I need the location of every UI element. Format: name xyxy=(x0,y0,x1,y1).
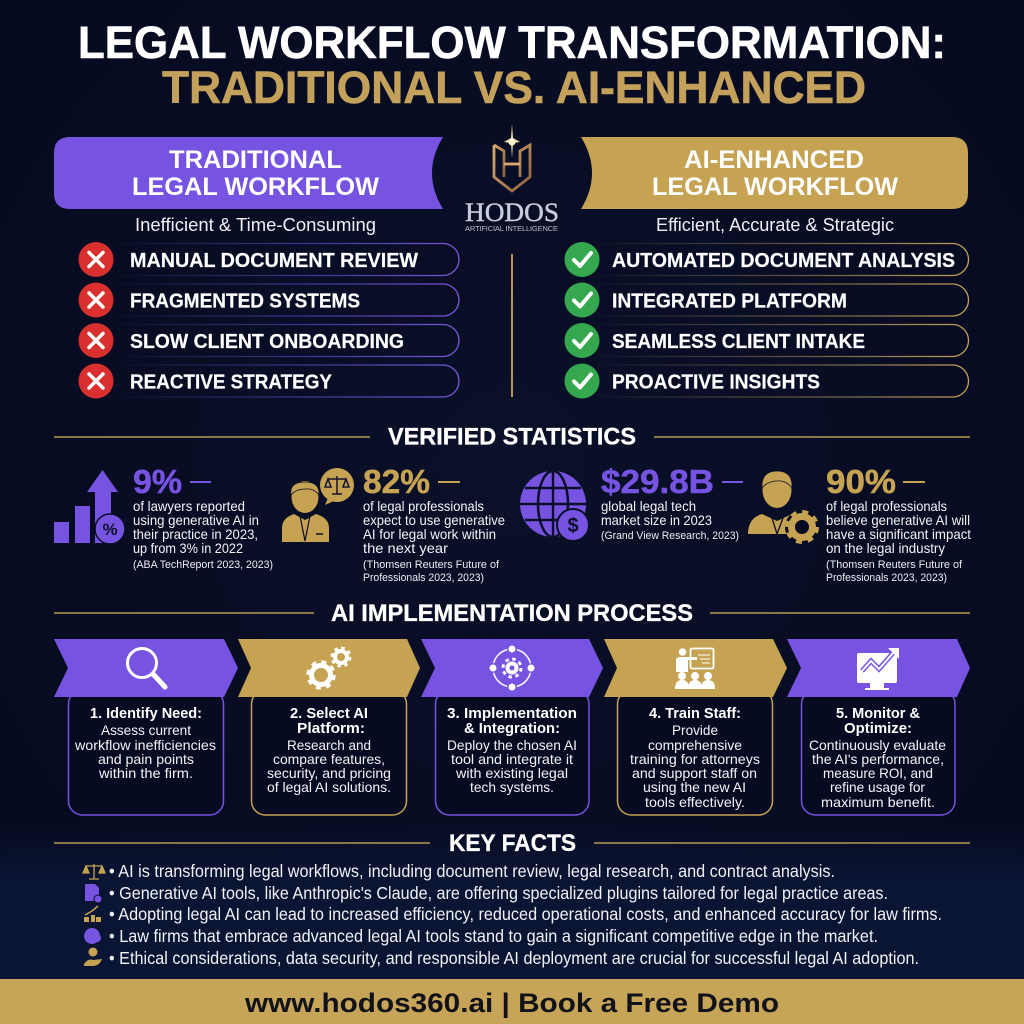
stat: 82 percent xyxy=(282,463,505,584)
stat: 29.8B: market size in 2023 xyxy=(601,512,712,528)
step 3: implementation and integration: & Integration: xyxy=(464,720,560,737)
list: key facts: • Ethical considerations, data security, and responsible AI deployment are crucial for successful legal AI adoption. xyxy=(109,948,919,968)
stat: 90 percent xyxy=(748,463,971,584)
step 2: select AI platform: Research and xyxy=(287,737,371,753)
stat: 90 percent: on the legal industry xyxy=(826,540,945,556)
step 5: monitor and optimize: measure ROI, and xyxy=(823,765,933,781)
step 3: implementation and integration: 3. Implementation xyxy=(447,705,577,722)
step 5: monitor and optimize: refine usage for xyxy=(830,779,925,795)
panel: AI-enhanced header banner: AI-ENHANCED xyxy=(684,146,864,174)
stat: 90 percent: (Thomsen Reuters Future of xyxy=(826,559,963,571)
stat: 82 percent: expect to use generative xyxy=(363,512,505,528)
title: TRADITIONAL VS. AI-ENHANCED xyxy=(162,62,866,113)
step 5: monitor and optimize: maximum benefit. xyxy=(821,794,935,810)
icon: integration cycle xyxy=(490,646,534,690)
logo: Hodos xyxy=(465,124,559,233)
stat: 82 percent: Professionals 2023, 2023) xyxy=(363,572,484,584)
footer call to action: www.hodos360.ai | Book a Free Demo xyxy=(244,988,779,1018)
heading: verified statistics: VERIFIED STATISTICS xyxy=(388,424,636,450)
step 2: select AI platform: of legal AI solutions. xyxy=(267,779,391,795)
step 5: monitor and optimize xyxy=(787,639,970,815)
title: LEGAL WORKFLOW TRANSFORMATION: xyxy=(78,17,946,68)
list: key facts: • Adopting legal AI can lead to increased efficiency, reduced operational costs, and enhanced accuracy for law firms. xyxy=(109,904,942,924)
logo: Hodos: HODOS xyxy=(465,198,559,227)
list: traditional problems: REACTIVE STRATEGY xyxy=(130,372,333,394)
step 4: train staff: 4. Train Staff: xyxy=(649,705,741,722)
list: key facts: • AI is transforming legal workflows, including document review, legal research, and contract analysis. xyxy=(109,861,835,881)
icon: gears xyxy=(308,648,350,688)
step 4: train staff: comprehensive xyxy=(648,737,742,753)
step 3: implementation and integration: Deploy the chosen AI xyxy=(447,737,577,753)
heading: AI implementation process: AI IMPLEMENTATION PROCESS xyxy=(331,600,693,627)
panel: traditional header banner: TRADITIONAL xyxy=(169,146,342,174)
stat: 90 percent: Professionals 2023, 2023) xyxy=(826,572,947,584)
icon: scales xyxy=(83,864,105,879)
stat: 9 percent: (ABA TechReport 2023, 2023) xyxy=(133,559,273,571)
stat: 90 percent: of legal professionals xyxy=(826,498,947,514)
step 4: train staff: tools effectively. xyxy=(645,794,745,810)
list: AI-enhanced benefits: PROACTIVE INSIGHTS xyxy=(612,372,820,394)
step 3: implementation and integration: tech systems. xyxy=(470,779,554,795)
list: AI-enhanced benefits: SEAMLESS CLIENT INTAKE xyxy=(612,331,865,353)
list: AI-enhanced benefits: INTEGRATED PLATFORM xyxy=(612,290,847,312)
step 5: monitor and optimize: Continuously evaluate xyxy=(809,737,946,753)
step 5: monitor and optimize: Optimize: xyxy=(844,720,912,737)
step 1: identify need: and pain points xyxy=(98,751,194,767)
stat: 29.8B xyxy=(520,463,743,542)
logo: Hodos: ARTIFICIAL INTELLIGENCE xyxy=(465,224,558,233)
list: traditional problems: SLOW CLIENT ONBOARDING xyxy=(130,331,404,353)
heading: key facts: KEY FACTS xyxy=(449,830,576,857)
step 2: select AI platform: Platform: xyxy=(297,720,365,737)
list: traditional problems xyxy=(78,242,459,398)
step 4: train staff: using the new AI xyxy=(643,779,746,795)
list: traditional problems: MANUAL DOCUMENT REVIEW xyxy=(130,250,418,272)
step 4: train staff: training for attorneys xyxy=(630,751,760,767)
stat: 82 percent: (Thomsen Reuters Future of xyxy=(363,559,500,571)
stat: 90 percent: have a significant impact xyxy=(826,526,971,542)
step 1: identify need: within the firm. xyxy=(98,765,193,781)
list: key facts: • Generative AI tools, like Anthropic's Claude, are offering specialized plugins tailored for legal practice areas. xyxy=(109,883,888,903)
stat: 82 percent: the next year xyxy=(363,540,448,556)
stat: 9 percent: 9% xyxy=(133,463,182,500)
step 2: select AI platform: compare features, xyxy=(273,751,385,767)
icon: document xyxy=(85,884,102,903)
icon: magnifier xyxy=(128,648,165,687)
stat: 9 percent xyxy=(54,463,273,571)
step 2: select AI platform: 2. Select AI xyxy=(290,705,368,722)
step 5: monitor and optimize: 5. Monitor & xyxy=(836,705,920,722)
stat: 90 percent: believe generative AI will xyxy=(826,512,970,528)
step 2: select AI platform xyxy=(238,639,420,815)
stat: 82 percent: of legal professionals xyxy=(363,498,484,514)
stat: 9 percent: using generative AI in xyxy=(133,512,259,528)
list: key facts xyxy=(83,861,942,968)
step 1: identify need: 1. Identify Need: xyxy=(90,705,202,722)
stat: 29.8B: (Grand View Research, 2023) xyxy=(601,530,739,542)
stat: 82 percent: AI for legal work within xyxy=(363,526,496,542)
stat: 29.8B: global legal tech xyxy=(601,498,696,514)
step 4: train staff: Provide xyxy=(672,722,718,738)
panel: traditional header banner xyxy=(54,137,443,209)
footer call to action xyxy=(0,979,1024,1024)
icon: hand with coin xyxy=(84,948,102,966)
text: AI-enhanced subtitle: Efficient, Accurate & Strategic xyxy=(656,215,894,235)
step 2: select AI platform: security, and pricing xyxy=(267,765,391,781)
icon: rising bars with percent xyxy=(54,470,125,544)
icon: globe with dollar xyxy=(520,471,589,541)
icon: lawyer with scales bubble xyxy=(282,468,354,542)
text: traditional subtitle: Inefficient & Time-Consuming xyxy=(135,215,376,235)
stat: 9 percent: their practice in 2023, xyxy=(133,526,258,542)
step 4: train staff: and support staff on xyxy=(632,765,757,781)
icon: monitor with growth chart xyxy=(857,648,899,690)
icon: workflow chart xyxy=(84,906,101,922)
step 3: implementation and integration xyxy=(421,639,603,815)
step 5: monitor and optimize: the AI's performance, xyxy=(812,751,944,767)
step 1: identify need: workflow inefficiencies xyxy=(74,737,216,753)
icon: AI head xyxy=(84,928,101,944)
panel: AI-enhanced header banner: LEGAL WORKFLOW xyxy=(652,173,898,201)
step 4: train staff xyxy=(604,639,787,815)
stat: 29.8B: $29.8B xyxy=(601,463,714,500)
stat: 9 percent: of lawyers reported xyxy=(133,498,245,514)
panel: AI-enhanced header banner xyxy=(581,137,968,209)
icon: professional with gear xyxy=(748,471,819,544)
list: AI-enhanced benefits xyxy=(564,242,968,398)
list: traditional problems: FRAGMENTED SYSTEMS xyxy=(130,290,360,312)
icon: globe with dollar: $ xyxy=(567,515,579,537)
icon: rising bars with percent: % xyxy=(102,520,118,539)
stat: 82 percent: 82% xyxy=(363,463,430,500)
list: AI-enhanced benefits: AUTOMATED DOCUMENT ANALYSIS xyxy=(612,250,955,272)
stat: 90 percent: 90% xyxy=(826,463,896,500)
title xyxy=(78,17,946,113)
step 1: identify need xyxy=(54,639,238,815)
stat: 9 percent: up from 3% in 2022 xyxy=(133,540,243,556)
step 3: implementation and integration: tool and integrate it xyxy=(451,751,573,767)
step 3: implementation and integration: with existing legal xyxy=(455,765,568,781)
panel: traditional header banner: LEGAL WORKFLOW xyxy=(132,173,379,201)
icon: trainer and audience xyxy=(675,648,715,689)
list: key facts: • Law firms that embrace advanced legal AI tools stand to gain a significant competitive edge in the market. xyxy=(109,926,878,946)
step 1: identify need: Assess current xyxy=(101,722,191,738)
